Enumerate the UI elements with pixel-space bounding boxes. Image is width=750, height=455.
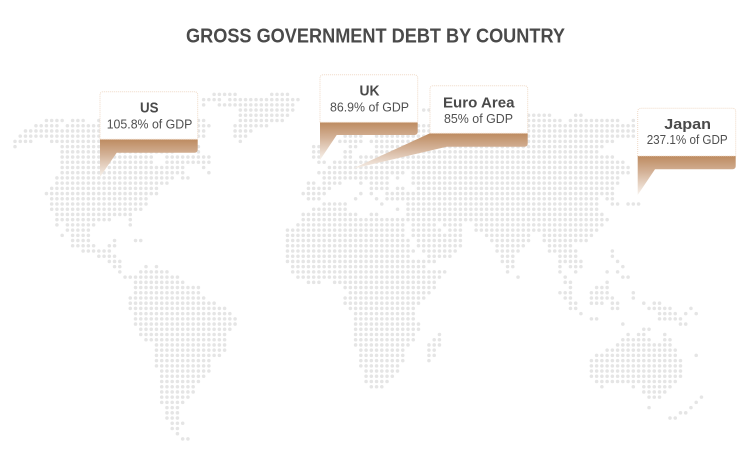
title: GROSS GOVERNMENT DEBT BY COUNTRY: [186, 26, 566, 48]
UK value: 86.9% of GDP: [330, 99, 409, 114]
UK label: UK: [360, 82, 380, 99]
Euro Area card: [430, 86, 528, 133]
callout: Japan: [638, 108, 736, 195]
US value: 105.8% of GDP: [107, 116, 192, 131]
US card: [100, 92, 198, 139]
callout: Euro Area: [352, 86, 528, 169]
Japan label: Japan: [664, 116, 711, 133]
Japan card: [638, 108, 736, 156]
UK pointer and ribbon: [320, 122, 418, 160]
Euro Area label: Euro Area: [443, 94, 515, 112]
US pointer and ribbon: [100, 139, 198, 177]
Euro Area value: 85% of GDP: [444, 111, 513, 126]
UK card: [320, 75, 418, 122]
dotted world map: [15, 94, 702, 439]
US label: US: [140, 99, 158, 116]
callout: US: [100, 92, 198, 177]
Japan pointer and ribbon: [638, 156, 736, 195]
Euro Area pointer and ribbon: [352, 133, 528, 169]
callout: UK: [320, 75, 418, 160]
Japan value: 237.1% of GDP: [647, 132, 728, 147]
